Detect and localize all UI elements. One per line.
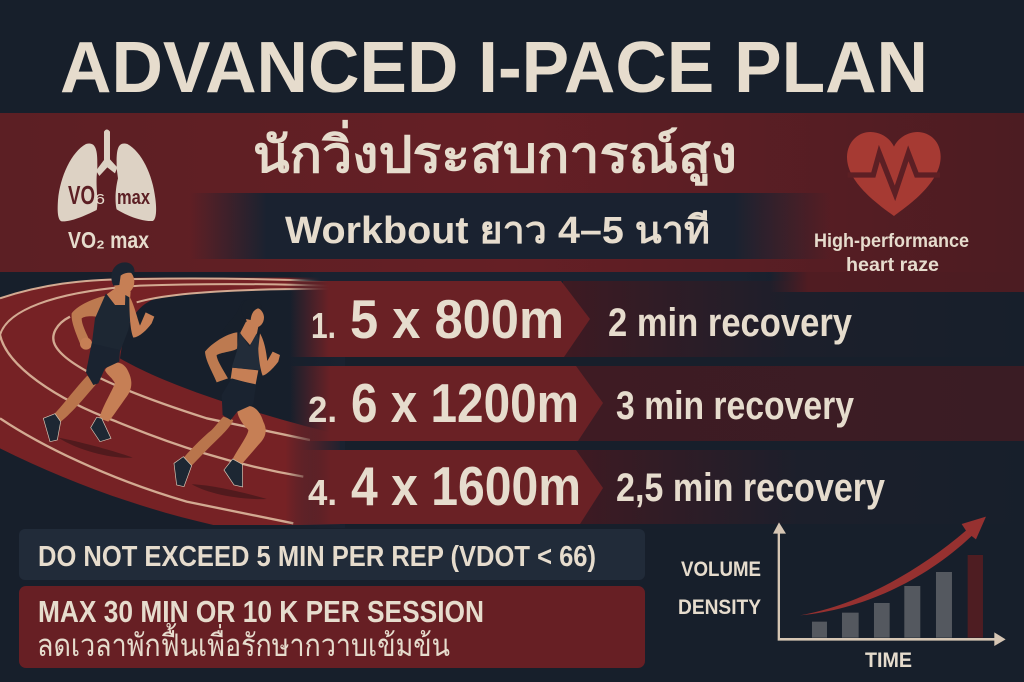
panel: session limit note: ลดเวลาพักฟื้นเพื่อรักษากวาบเข้มข้น [37,623,450,663]
interval 1 reps: 5 x 800m [350,288,564,350]
interval 1 recovery: 2 min recovery [608,301,853,345]
illustration: running track [0,272,345,528]
interval 2 reps: 6 x 1200m [351,372,579,434]
interval 3 reps: 4 x 1600m [351,455,581,517]
label: high-performance heart rate [814,231,969,276]
panel: interval 2 [290,366,1024,441]
illustration: male runner [43,262,154,442]
title: ADVANCED I-PACE PLAN [60,28,928,108]
icon: lungs: VO [68,180,95,210]
interval 3 recovery: 2,5 min recovery [616,466,886,510]
chart: volume density over time: DENSITY [678,596,761,619]
icon: lungs: 6 [95,191,105,208]
growth arrow [800,517,986,615]
icon: lungs: max [117,187,150,209]
chart: volume density over time: TIME [865,649,912,672]
panel: rep limit note [19,529,645,580]
panel: interval 1 [290,281,1024,357]
panel: red header band [0,113,1024,272]
panel: interval 3 [290,450,1024,524]
panel: rep limit note: DO NOT EXCEED 5 MIN PER REP (VDOT < 66) [38,541,596,573]
number 2: 2. [308,389,337,430]
axes [773,522,1006,646]
illustration: female runner [174,299,280,487]
chart: volume density over time [678,517,1006,672]
heading: workout length: Workbout ยาว 4–5 นาที [285,210,710,252]
number 4: 4. [308,472,337,513]
chart: volume density over time: VOLUME [681,558,761,581]
icon: heart with pulse [847,132,941,216]
panel: session limit note: MAX 30 MIN OR 10 K PER SESSION [38,594,484,629]
number 1: 1. [311,305,336,346]
label: VO2 max: VO₂ max [68,227,149,253]
label: high-performance heart rate: heart raze [846,255,939,276]
heading: Thai subtitle: นักวิ่งประสบการณ์สูง [253,120,737,186]
label: high-performance heart rate: High-performance [814,231,969,252]
panel: session limit note [19,586,645,668]
interval 2 recovery: 3 min recovery [616,384,855,428]
bars [812,555,983,638]
panel: header band lower edge [290,272,1024,292]
icon: lungs [58,129,156,221]
